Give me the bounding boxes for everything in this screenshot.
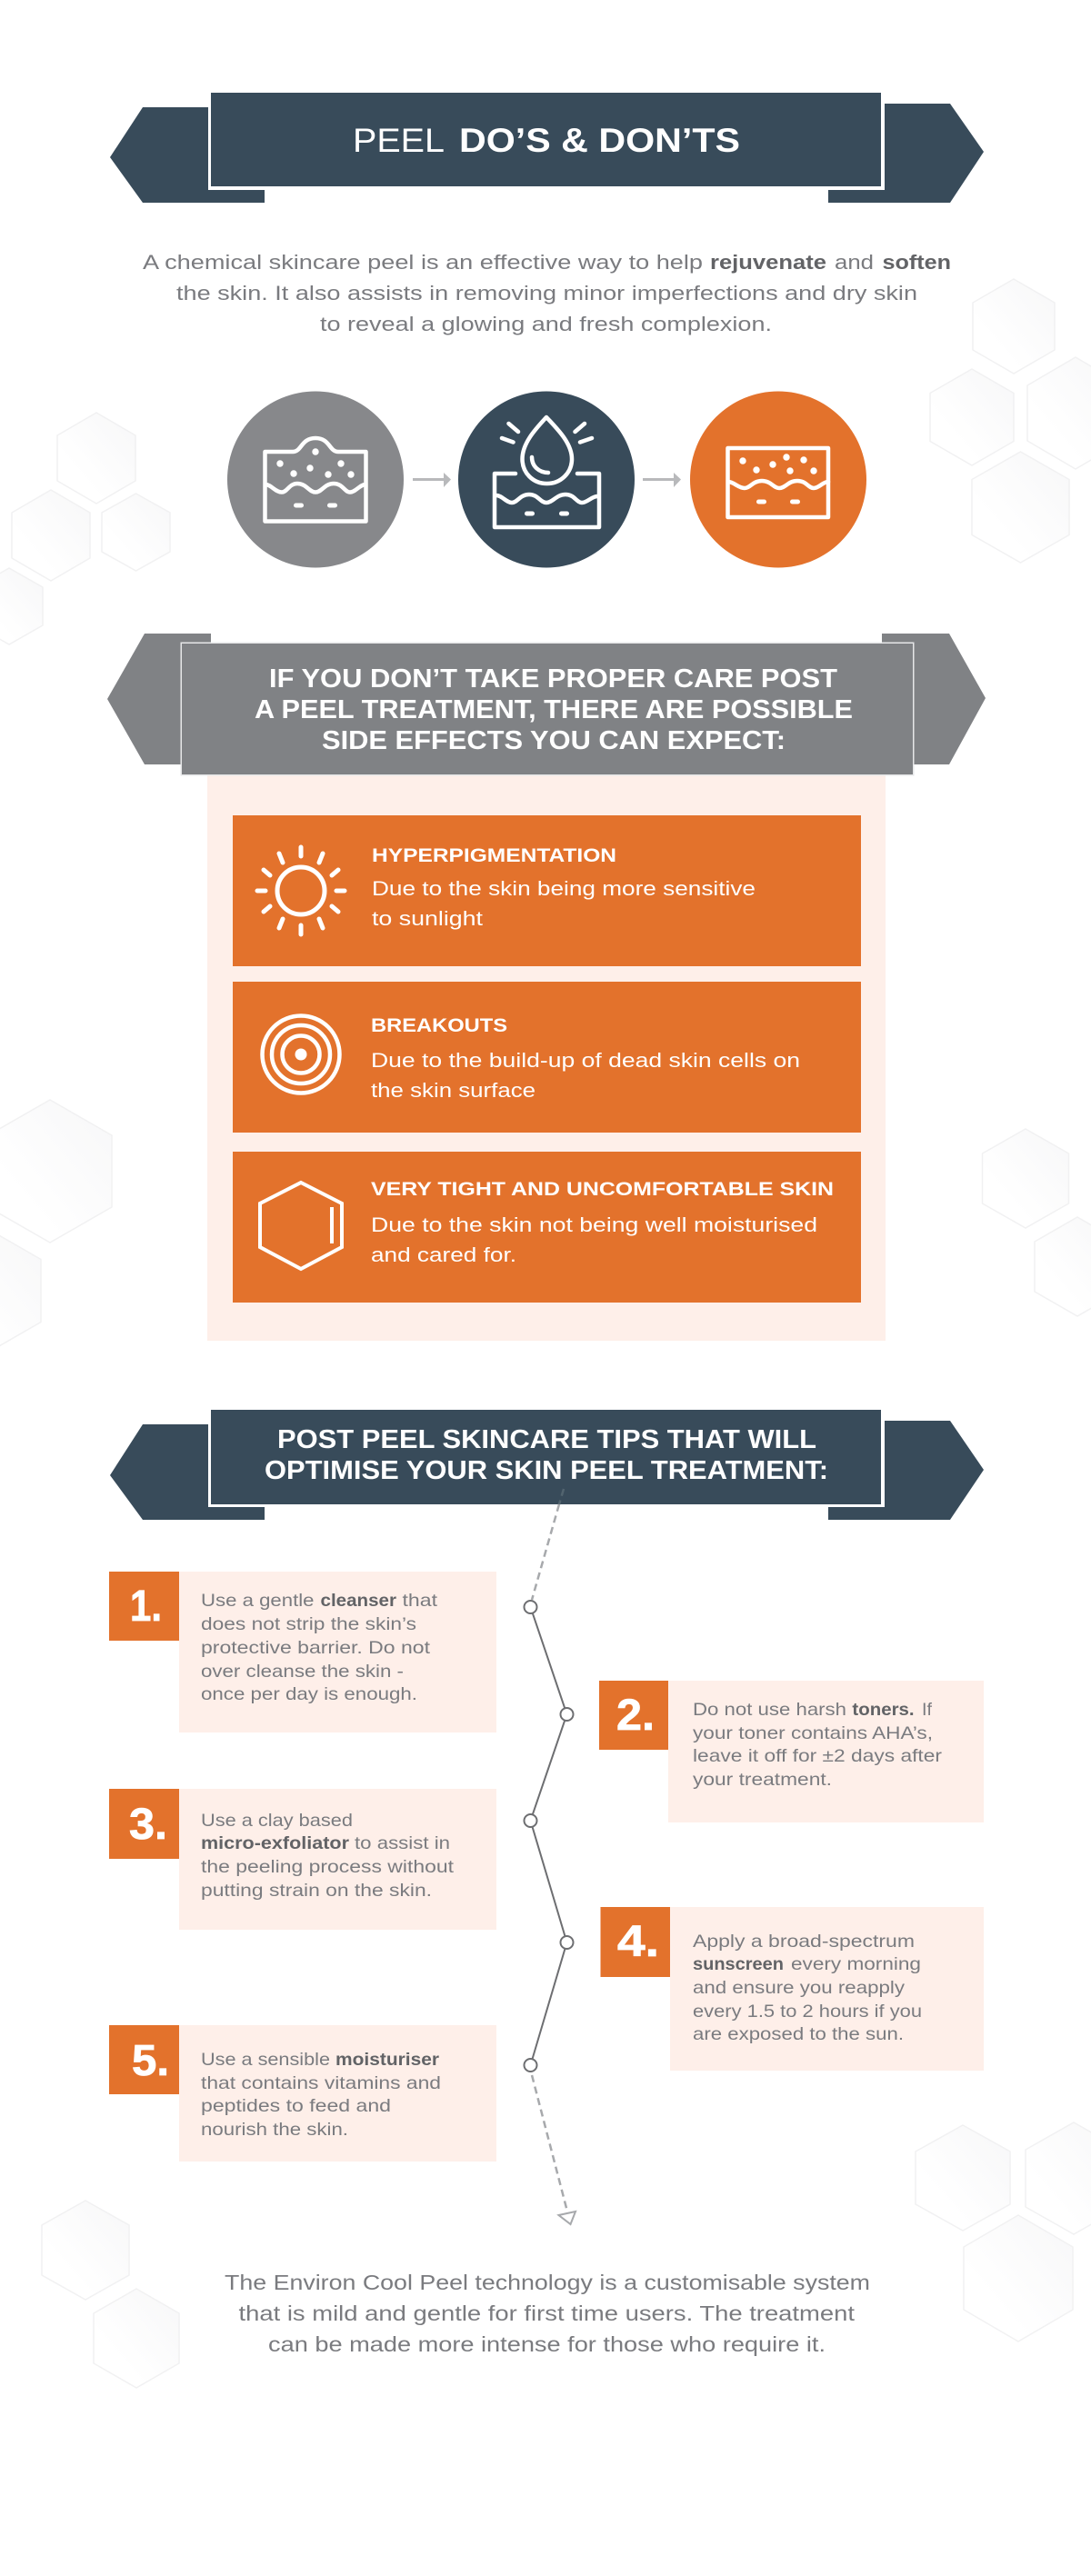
side effects heading: IF YOU DON’T TAKE PROPER CARE POST [269, 664, 837, 694]
tip 4: and ensure you reapply [693, 1978, 905, 1998]
tip 3: putting strain on the skin. [201, 1881, 432, 1901]
intro text: to reveal a glowing and fresh complexion. [320, 313, 772, 335]
side effects heading: A PEEL TREATMENT, THERE ARE POSSIBLE [255, 695, 853, 724]
side effects heading: SIDE EFFECTS YOU CAN EXPECT: [322, 726, 786, 755]
tip 4: every 1.5 to 2 hours if you [693, 2002, 922, 2022]
card text: HYPERPIGMENTATION [372, 845, 616, 866]
tip 3: to assist in [355, 1833, 450, 1853]
tip 1: does not strip the skin’s [201, 1614, 416, 1634]
tip 2: your toner contains AHA’s, [693, 1723, 933, 1743]
tip 2: leave it off for ±2 days after [693, 1746, 943, 1766]
card text [371, 1179, 834, 1266]
tip 4: are exposed to the sun. [693, 2024, 904, 2044]
card: hyperpigmentation [233, 815, 861, 966]
side effects heading [255, 664, 853, 755]
tip 1: protective barrier. Do not [201, 1638, 431, 1658]
intro text: and [835, 251, 874, 274]
tip 1: once per day is enough. [201, 1684, 417, 1704]
icon: smooth skin on orange circle [690, 391, 866, 567]
tip 3: micro-exfoliator [201, 1833, 349, 1853]
card text: Due to the skin being more sensitive [372, 877, 756, 900]
tip 2: 2. [616, 1692, 655, 1740]
card text: and cared for. [371, 1243, 516, 1266]
tip 3: 3. [129, 1801, 167, 1849]
tip 5: 5. [132, 2037, 169, 2085]
tip 2 [599, 1681, 984, 1822]
tip 5: moisturiser [335, 2050, 439, 2070]
panel: side effects background [207, 774, 886, 1341]
tips heading: POST PEEL SKINCARE TIPS THAT WILL [277, 1425, 816, 1454]
tip 2: Do not use harsh [693, 1700, 846, 1720]
tip 4: 4. [617, 1918, 659, 1966]
tip 4: every morning [791, 1954, 921, 1974]
timeline [524, 1489, 576, 2224]
tips heading [265, 1425, 828, 1485]
tip 3: Use a clay based [201, 1811, 353, 1831]
card text: Due to the skin not being well moisturised [371, 1213, 817, 1236]
closing text [225, 2271, 870, 2356]
card text: to sunlight [372, 907, 483, 930]
tip 2: toners. [852, 1700, 915, 1720]
tip 1: over cleanse the skin - [201, 1662, 404, 1682]
intro text: soften [882, 251, 951, 274]
icon: hexagon [260, 1183, 342, 1269]
title: PEEL [353, 122, 445, 159]
title banner [110, 86, 984, 203]
tips banner [110, 1404, 984, 1520]
tip 4: Apply a broad-spectrum [693, 1932, 915, 1952]
tip 2: your treatment. [693, 1770, 832, 1790]
card text: the skin surface [371, 1079, 535, 1102]
tip 1 [109, 1572, 496, 1732]
card text [371, 1015, 800, 1102]
tip 2: If [922, 1700, 933, 1720]
tips heading: OPTIMISE YOUR SKIN PEEL TREATMENT: [265, 1456, 828, 1485]
card: breakouts [233, 982, 861, 1133]
intro text: A chemical skincare peel is an effective way to help [143, 251, 703, 274]
tip 5: nourish the skin. [201, 2120, 348, 2140]
card: tight skin [233, 1152, 861, 1303]
tip 4 [600, 1907, 984, 2071]
icon: skin with bump on grey circle [227, 391, 404, 567]
intro text [143, 251, 951, 335]
tip 1: cleanser [320, 1591, 396, 1611]
title: DO’S & DON’TS [459, 122, 740, 159]
tip 3: the peeling process without [201, 1857, 455, 1877]
tip 1: that [402, 1591, 438, 1611]
card text: VERY TIGHT AND UNCOMFORTABLE SKIN [371, 1179, 834, 1200]
tip 1: Use a gentle [201, 1591, 315, 1611]
tip 3 [109, 1789, 496, 1930]
closing text: The Environ Cool Peel technology is a customisable system [225, 2271, 870, 2294]
card text: BREAKOUTS [371, 1015, 507, 1036]
closing text: that is mild and gentle for first time users. The treatment [238, 2301, 856, 2325]
tip 4: sunscreen [693, 1954, 784, 1974]
tip 5 [109, 2025, 496, 2162]
tip 5: that contains vitamins and [201, 2073, 441, 2093]
side effects banner [107, 634, 986, 776]
card text: Due to the build-up of dead skin cells on [371, 1049, 800, 1072]
tip 5: peptides to feed and [201, 2096, 391, 2116]
arrow: blue to orange [643, 473, 681, 487]
intro text: rejuvenate [710, 251, 826, 274]
card text [372, 845, 756, 930]
tip 1: 1. [130, 1583, 162, 1631]
icon: water drop on blue circle [458, 391, 635, 567]
tip 5: Use a sensible [201, 2050, 330, 2070]
closing text: can be made more intense for those who require it. [268, 2332, 826, 2356]
arrow: grey to blue [413, 473, 451, 487]
icon: target rings [262, 1016, 340, 1093]
intro text: the skin. It also assists in removing minor imperfections and dry skin [176, 282, 917, 305]
icon: sun [257, 847, 345, 934]
